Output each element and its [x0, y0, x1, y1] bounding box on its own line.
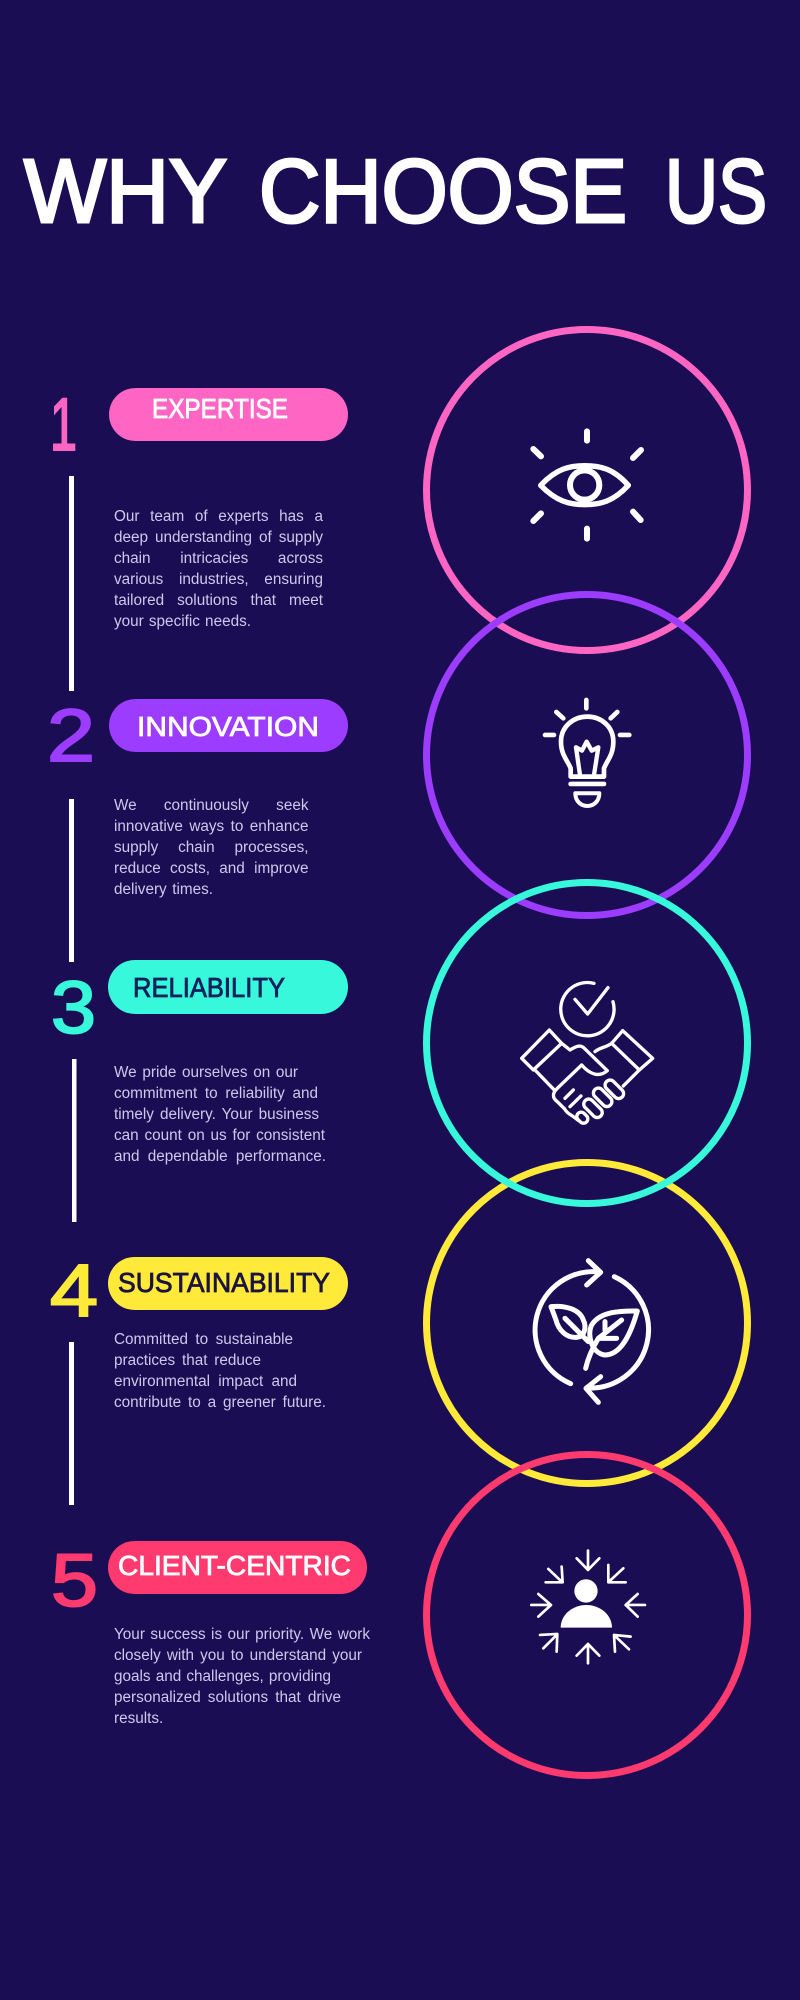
body text: and dependable performance.	[114, 1148, 326, 1165]
pill label: CLIENT-CENTRIC	[118, 1550, 351, 1581]
body text: can count on us for consistent	[114, 1127, 325, 1144]
ring: cyan	[426, 882, 748, 1204]
body text: environmental impact and	[114, 1373, 297, 1390]
pill: expertise	[109, 388, 348, 441]
body text	[114, 1624, 394, 1734]
number 2: 2	[47, 694, 95, 777]
body text: personalized solutions that drive	[114, 1689, 341, 1706]
ring: yellow	[426, 1162, 748, 1484]
pill: innovation	[109, 699, 348, 752]
body text: practices that reduce	[114, 1352, 261, 1369]
body text	[114, 506, 354, 636]
panel: expertise	[50, 383, 354, 691]
title	[24, 142, 767, 242]
body text: chain intricacies across	[114, 550, 323, 567]
body text: closely with you to understand your	[114, 1647, 362, 1664]
body text: We pride ourselves on our	[114, 1064, 298, 1081]
body text: results.	[114, 1710, 163, 1727]
panel: sustainability	[50, 1249, 354, 1505]
number 4: 4	[50, 1249, 98, 1332]
icon: eye	[533, 431, 641, 539]
pill: client-centric	[108, 1541, 367, 1594]
body text: your specific needs.	[114, 613, 251, 630]
ring: pink	[426, 330, 748, 650]
connector line	[72, 1059, 76, 1222]
body text: commitment to reliability and	[114, 1085, 318, 1102]
body text: innovative ways to enhance	[114, 818, 308, 835]
connector line	[69, 1342, 74, 1505]
connector line	[69, 799, 74, 962]
body text: We continuously seek	[114, 797, 308, 814]
panel: innovation	[47, 694, 354, 962]
body text: tailored solutions that meet	[114, 592, 323, 609]
body text: deep understanding of supply	[114, 529, 323, 546]
number 3: 3	[51, 966, 96, 1049]
body text: timely delivery. Your business	[114, 1106, 319, 1123]
body text: various industries, ensuring	[114, 571, 323, 588]
ring: purple	[426, 594, 748, 916]
body text: goals and challenges, providing	[114, 1668, 331, 1685]
title: CHOOSE	[259, 142, 627, 242]
number 5: 5	[51, 1539, 98, 1622]
icon: handshake with check	[522, 983, 653, 1125]
body text	[114, 1329, 354, 1419]
title: WHY	[24, 142, 227, 242]
body text: contribute to a greener future.	[114, 1394, 326, 1411]
pill label: EXPERTISE	[152, 393, 288, 424]
body text: supply chain processes,	[114, 839, 308, 856]
panel: client-centric	[51, 1539, 394, 1734]
ring: red	[426, 1454, 748, 1776]
body text	[114, 1062, 354, 1172]
title: US	[665, 142, 767, 242]
pill: sustainability	[108, 1257, 348, 1310]
body text: Your success is our priority. We work	[114, 1626, 370, 1643]
pill label: RELIABILITY	[133, 972, 285, 1003]
panel: reliability	[51, 960, 354, 1222]
icon: light bulb	[545, 700, 629, 806]
pill: reliability	[108, 960, 348, 1014]
icon: leaf recycle	[535, 1261, 649, 1402]
body text	[114, 795, 354, 905]
body text: reduce costs, and improve	[114, 860, 308, 877]
connector line	[69, 476, 74, 691]
body text: Our team of experts has a	[114, 508, 323, 525]
pill label: INNOVATION	[137, 711, 319, 742]
number 1: 1	[50, 383, 77, 466]
pill label: SUSTAINABILITY	[118, 1267, 330, 1298]
body text: Committed to sustainable	[114, 1331, 293, 1348]
body text: delivery times.	[114, 881, 213, 898]
icon: person with arrows	[531, 1551, 645, 1663]
